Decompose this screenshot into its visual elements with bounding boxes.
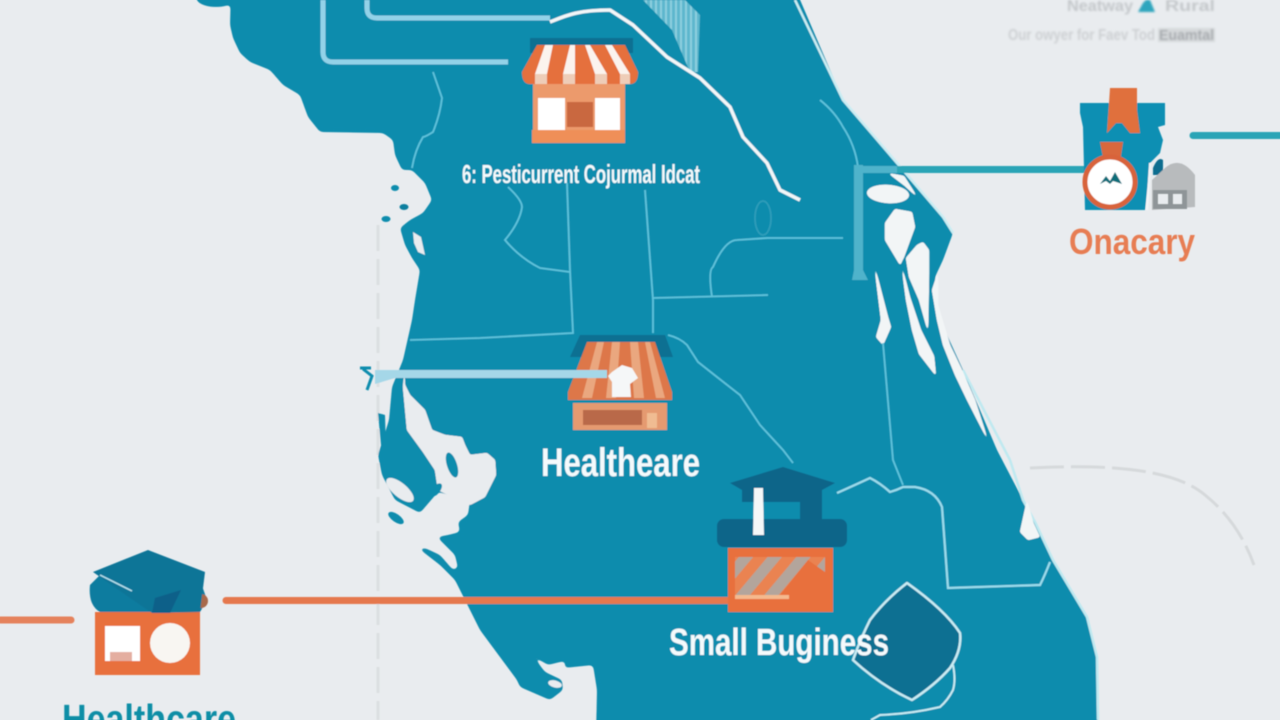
dashed arc bbox=[1030, 467, 1254, 565]
top hatched wedge bbox=[643, 0, 700, 72]
connector: east line bbox=[852, 165, 1087, 280]
icon: graduation building bbox=[717, 467, 847, 612]
text: top map label: 6: Pesticurrent Cojurmal Idcat bbox=[462, 159, 700, 189]
connector: middle line bbox=[360, 368, 607, 390]
lake okeechobee bbox=[853, 583, 960, 720]
white river bbox=[550, 10, 800, 200]
text: Healtheare label: Healtheare bbox=[541, 441, 700, 485]
icon: white hand bbox=[608, 365, 638, 397]
header text: top right: Euamtal bbox=[1159, 27, 1214, 44]
dashed guide line bbox=[376, 225, 380, 720]
icon: storefront top bbox=[522, 38, 638, 143]
text: Onacary label: Onacary bbox=[1069, 221, 1195, 262]
connector: left orange line bbox=[0, 616, 71, 624]
top connector lines bbox=[323, 0, 550, 62]
map: Florida land mass bbox=[196, 0, 1098, 720]
connector: right teal line bbox=[1193, 132, 1280, 139]
connector: orange line bbox=[226, 597, 730, 604]
icon: medal tower bbox=[1080, 88, 1195, 210]
header text: top right: Our owyer for Faev Tod bbox=[1008, 27, 1155, 44]
header text: top right bbox=[1008, 0, 1215, 44]
icon: storefront middle bbox=[568, 335, 673, 430]
icon: healthcare left bbox=[90, 550, 208, 675]
east coast lagoons bbox=[795, 0, 1098, 720]
text: Small Business label: Small Buginess bbox=[669, 622, 889, 664]
county boundary lines bbox=[410, 72, 1050, 588]
